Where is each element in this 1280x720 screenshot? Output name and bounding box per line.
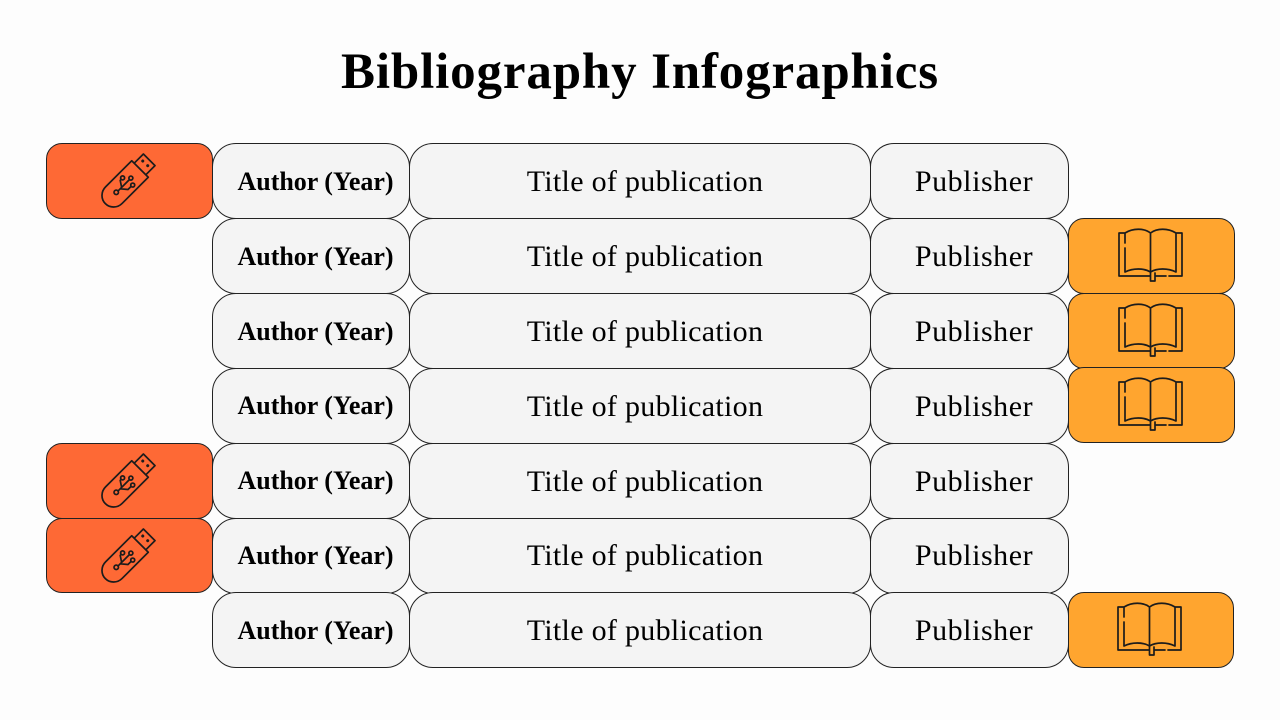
row 1 [46, 143, 1069, 219]
icon tile: open book [1068, 592, 1234, 668]
title cell [409, 143, 871, 219]
title cell: Title of publication [527, 614, 763, 647]
icon tile: USB drive [46, 443, 213, 519]
author cell: Author (Year) [238, 391, 393, 420]
author cell: Author (Year) [238, 616, 393, 645]
publisher cell: Publisher [915, 465, 1033, 498]
title cell: Title of publication [527, 465, 763, 498]
publisher cell: Publisher [915, 614, 1033, 647]
author cell [212, 518, 410, 594]
publisher cell: Publisher [915, 539, 1033, 572]
publisher cell [870, 143, 1069, 219]
publisher cell: Publisher [915, 315, 1033, 348]
author cell: Author (Year) [238, 466, 393, 495]
author cell: Author (Year) [238, 242, 393, 271]
title cell: Title of publication [527, 390, 763, 423]
title cell [409, 443, 871, 519]
icon tile: open book [1068, 293, 1235, 369]
row 4 [212, 367, 1235, 444]
author cell [212, 368, 410, 444]
title cell [409, 368, 871, 444]
author cell [212, 143, 410, 219]
publisher cell [870, 518, 1069, 594]
icon tile: USB drive [46, 518, 213, 593]
title: Bibliography Infographics [341, 44, 939, 100]
title cell [409, 218, 871, 294]
title cell [409, 518, 871, 594]
title cell: Title of publication [527, 315, 763, 348]
publisher cell [870, 368, 1069, 444]
row 6 [46, 518, 1069, 593]
publisher cell: Publisher [915, 165, 1033, 198]
row 2 [212, 218, 1235, 294]
row 7 [212, 592, 1234, 668]
author cell: Author (Year) [238, 317, 393, 346]
title cell: Title of publication [527, 240, 763, 273]
icon tile: open book [1068, 367, 1235, 443]
publisher cell [870, 592, 1069, 668]
author cell [212, 293, 410, 369]
author cell [212, 592, 410, 668]
title cell: Title of publication [527, 539, 763, 572]
author cell [212, 218, 410, 294]
publisher cell [870, 293, 1069, 369]
author cell: Author (Year) [238, 167, 393, 196]
publisher cell [870, 443, 1069, 519]
publisher cell: Publisher [915, 390, 1033, 423]
publisher cell: Publisher [915, 240, 1033, 273]
author cell: Author (Year) [238, 541, 393, 570]
row 3 [212, 294, 1235, 368]
publisher cell [870, 218, 1069, 294]
row 5 [46, 443, 1069, 518]
icon tile: open book [1068, 218, 1235, 294]
title cell: Title of publication [527, 165, 763, 198]
title cell [409, 293, 871, 369]
icon tile: USB drive [46, 143, 213, 219]
title cell [409, 592, 871, 668]
author cell [212, 443, 410, 519]
